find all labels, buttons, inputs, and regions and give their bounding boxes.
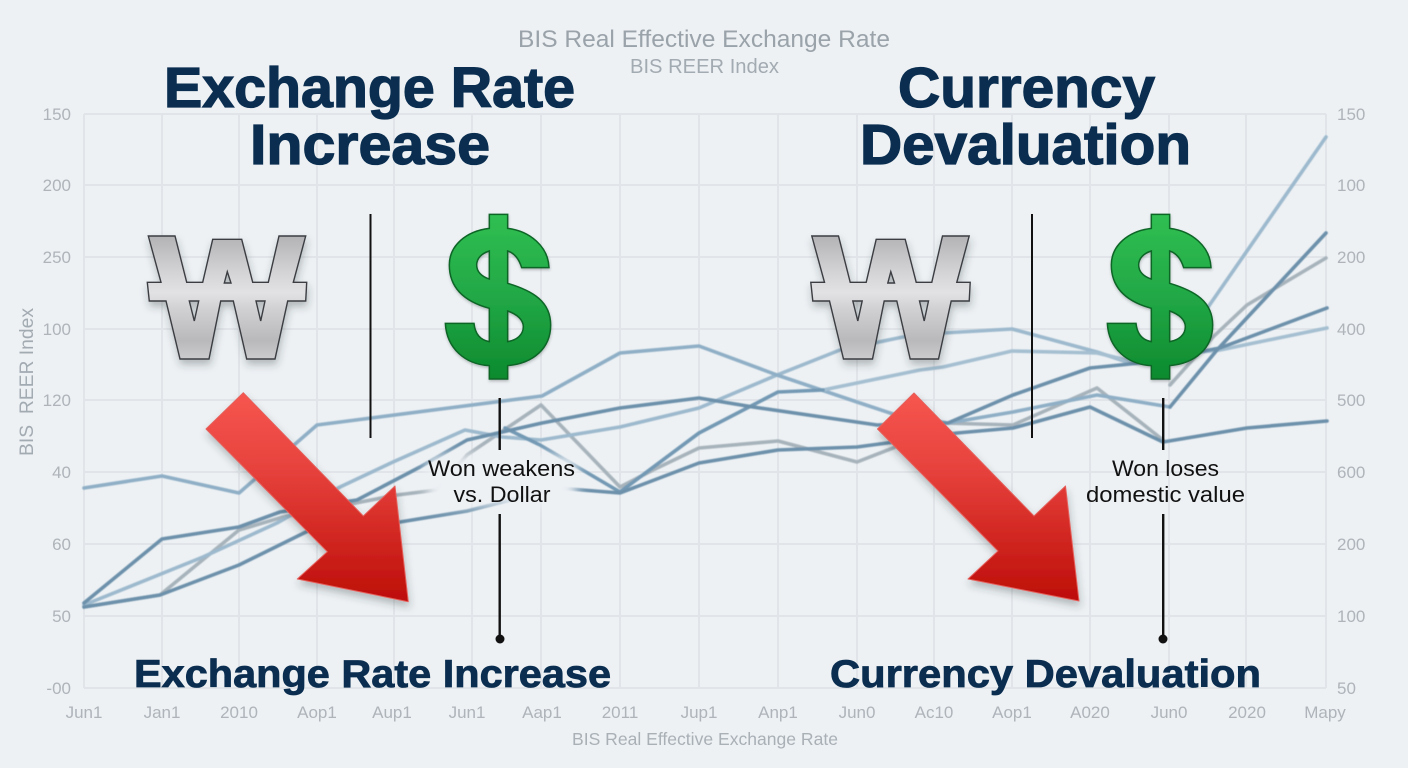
right y axis labels: 400 bbox=[1337, 320, 1365, 339]
x axis labels: Aap1 bbox=[522, 703, 562, 722]
icon: dollar left bbox=[445, 214, 551, 379]
left y axis labels: 250 bbox=[43, 248, 71, 267]
chart title: BIS Real Effective Exchange Rate bbox=[518, 26, 890, 53]
right y axis labels: 600 bbox=[1337, 463, 1365, 482]
heading: currency devaluation: Currency bbox=[898, 56, 1155, 120]
right y axis labels: 100 bbox=[1337, 607, 1365, 626]
heading: currency devaluation: Devaluation bbox=[860, 113, 1191, 177]
right y axis labels: 500 bbox=[1337, 391, 1365, 410]
label halo over lines bbox=[428, 456, 576, 506]
left y axis labels bbox=[43, 105, 71, 698]
icon: dollar right bbox=[1107, 214, 1213, 379]
heading: exchange rate increase: Increase bbox=[250, 113, 490, 177]
right y axis labels: 50 bbox=[1337, 679, 1356, 698]
x axis labels: Mapy bbox=[1304, 703, 1346, 722]
heading: currency devaluation bbox=[860, 56, 1191, 177]
left y axis labels: 100 bbox=[43, 320, 71, 339]
x axis labels: Anp1 bbox=[758, 703, 798, 722]
x axis labels: 2020 bbox=[1228, 703, 1266, 722]
heading: exchange rate increase bbox=[164, 56, 575, 177]
bottom label: exchange rate increase: Exchange Rate Increase bbox=[134, 653, 611, 696]
x axis labels: Jup1 bbox=[681, 703, 717, 722]
divider left bbox=[370, 214, 372, 438]
x axis labels bbox=[66, 703, 1346, 722]
left y axis labels: 50 bbox=[52, 607, 71, 626]
x axis labels: A020 bbox=[1070, 703, 1110, 722]
arrow: right down arrow bbox=[878, 393, 1079, 601]
divider right bbox=[1031, 214, 1033, 438]
x axis labels: Aup1 bbox=[372, 703, 412, 722]
right y axis labels: 100 bbox=[1337, 176, 1365, 195]
callout: won loses domestic value bbox=[1086, 398, 1245, 644]
arrow: left down arrow bbox=[206, 393, 408, 602]
callout: won loses domestic value: Won loses bbox=[1112, 456, 1219, 481]
right y axis labels: 200 bbox=[1337, 535, 1365, 554]
y axis title: BIS REER Index bbox=[17, 307, 38, 456]
x axis labels: Aop1 bbox=[992, 703, 1032, 722]
chart grid bbox=[84, 114, 1326, 688]
x axis labels: Ac10 bbox=[915, 703, 953, 722]
right y axis labels: 150 bbox=[1337, 105, 1365, 124]
x axis labels: Jun1 bbox=[66, 703, 102, 722]
left y axis labels: 60 bbox=[52, 535, 71, 554]
left y axis labels: 120 bbox=[43, 391, 71, 410]
left y axis labels: 40 bbox=[52, 463, 71, 482]
left y axis labels: 150 bbox=[43, 105, 71, 124]
x axis labels: Jan1 bbox=[144, 703, 180, 722]
x axis labels: Aop1 bbox=[297, 703, 337, 722]
bottom label: currency devaluation: Currency Devaluation bbox=[830, 653, 1261, 696]
x axis labels: Jun1 bbox=[449, 703, 485, 722]
chart title bbox=[518, 26, 890, 78]
callout: won weakens bbox=[428, 398, 575, 644]
right y axis labels: 200 bbox=[1337, 248, 1365, 267]
left y axis labels: 200 bbox=[43, 176, 71, 195]
left y axis labels: -00 bbox=[46, 679, 71, 698]
chart title: BIS REER Index bbox=[630, 56, 779, 78]
x axis labels: Jun0 bbox=[839, 703, 875, 722]
line chart series bbox=[84, 137, 1327, 607]
callout: won loses domestic value: domestic value bbox=[1086, 482, 1245, 507]
callout: won weakens: Won weakens bbox=[428, 456, 575, 481]
x axis labels: Jun0 bbox=[1151, 703, 1187, 722]
icon: won left bbox=[147, 236, 307, 359]
x axis labels: 2010 bbox=[220, 703, 258, 722]
callout: won weakens: vs. Dollar bbox=[454, 482, 551, 507]
right y axis labels bbox=[1337, 105, 1365, 698]
heading: exchange rate increase: Exchange Rate bbox=[164, 56, 575, 120]
icon: won right bbox=[811, 236, 970, 359]
x axis title: BIS Real Effective Exchange Rate bbox=[572, 729, 838, 749]
x axis labels: 2011 bbox=[602, 703, 638, 722]
